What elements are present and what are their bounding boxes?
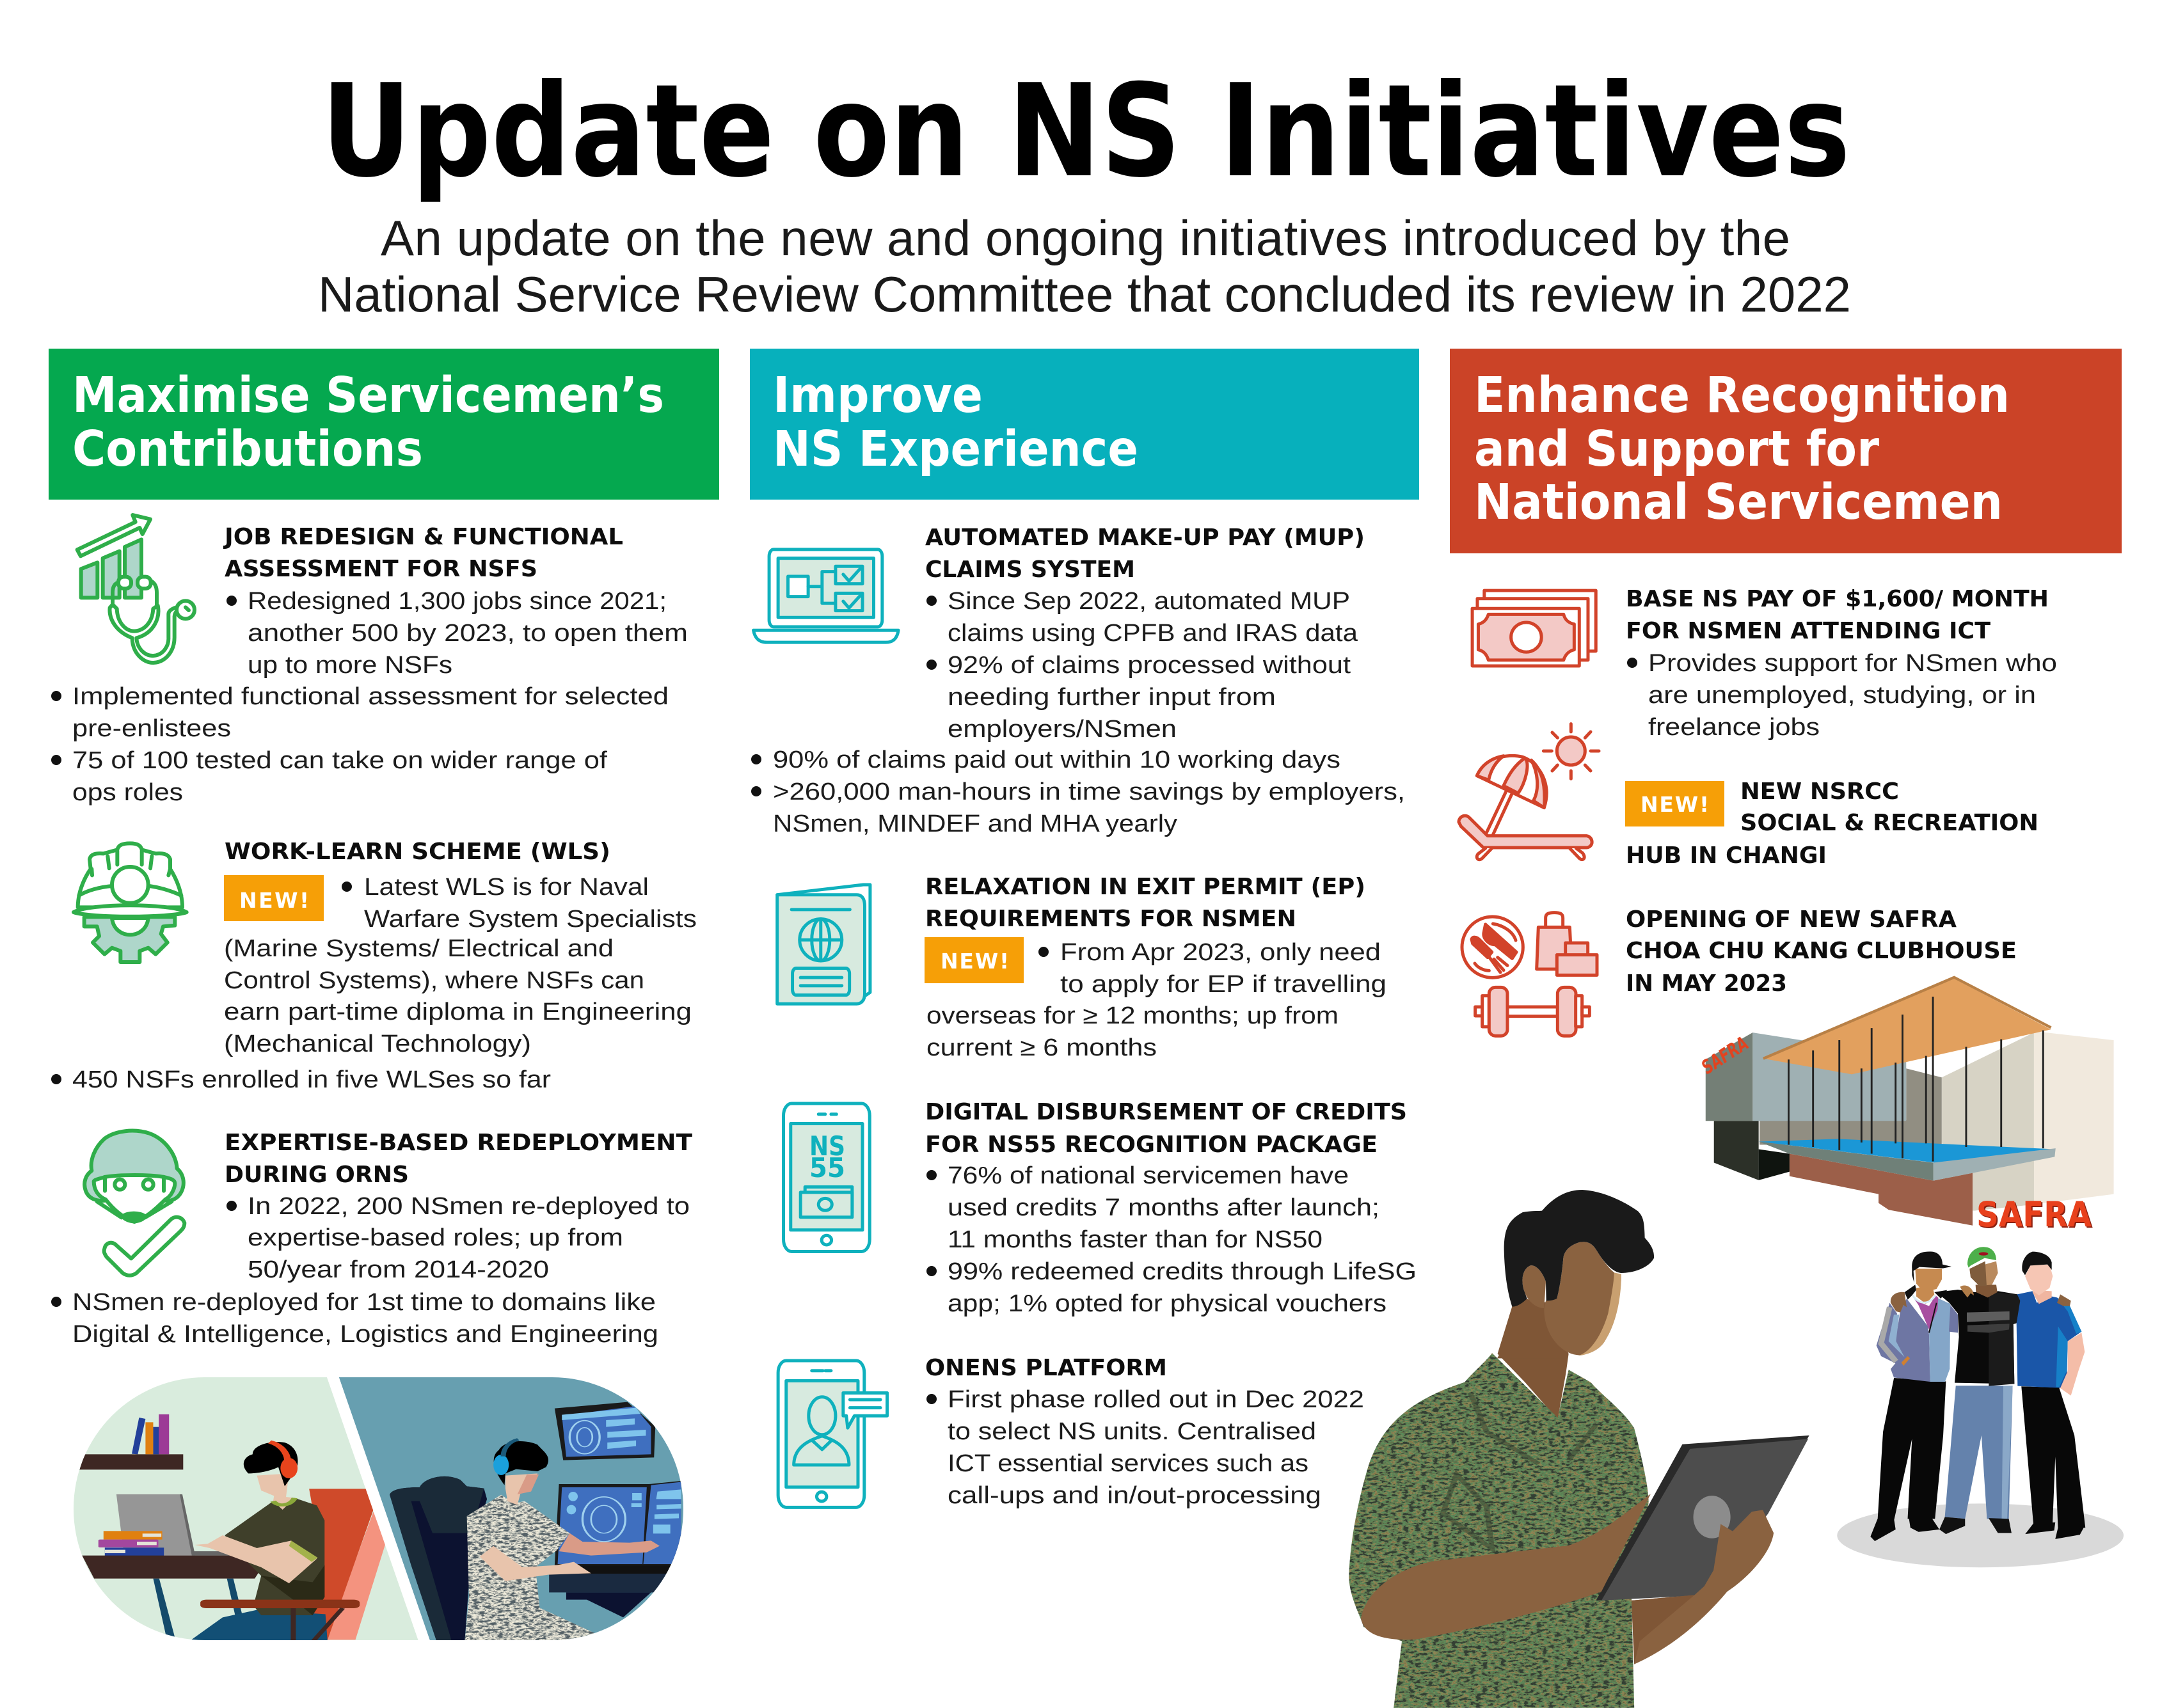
bullet list: 90% of claims paid out within 10 working days: [773, 747, 1340, 773]
left background: [74, 1377, 418, 1640]
tablet: [1596, 1435, 1809, 1601]
bullet list: Provides support for NSmen who: [1648, 650, 2057, 677]
laptop: [116, 1494, 235, 1556]
bullet list: [751, 588, 1405, 837]
lower monitors: [555, 1481, 681, 1565]
section: expertise-based redeployment: [51, 1130, 692, 1348]
subtitle: [318, 210, 1851, 322]
bullet list: call-ups and in/out-processing: [948, 1482, 1321, 1509]
bullet list: 76% of national servicemen have: [948, 1162, 1349, 1189]
bullet list: needing further input from: [948, 684, 1276, 711]
heading: AUTOMATED MAKE-UP PAY (MUP): [925, 525, 1365, 551]
neck: [1498, 1301, 1569, 1419]
body text: (Mechanical Technology): [224, 1031, 531, 1057]
bullet list: 92% of claims processed without: [948, 652, 1351, 679]
heading: JOB REDESIGN & FUNCTIONAL: [223, 524, 623, 550]
badge: new: [1625, 781, 1724, 826]
badge: new: NEW!: [239, 888, 309, 913]
panel: enhance recognition and support header: Enhance Recognition: [1474, 367, 2010, 424]
legs: left friend: [1870, 1378, 1946, 1541]
panel: maximise servicemen's contributions header: Contributions: [72, 421, 423, 478]
collar fold: [1443, 1393, 1596, 1549]
icon: phone with NS55: [784, 1103, 870, 1251]
SAFRA wall logo: SAFRA: [1978, 1196, 2093, 1236]
serviceman: [465, 1439, 660, 1642]
body text: Warfare System Specialists: [364, 906, 697, 933]
heading: NEW NSRCC: [1740, 779, 1899, 805]
bullet list: are unemployed, studying, or in: [1648, 682, 2036, 709]
bullet list: claims using CPFB and IRAS data: [948, 620, 1358, 647]
shelf and books: [79, 1414, 183, 1469]
heading: SOCIAL & RECREATION: [1740, 810, 2038, 836]
heading: CHOA CHU KANG CLUBHOUSE: [1626, 938, 2017, 964]
body text: Control Systems), where NSFs can: [224, 967, 644, 994]
bullet list: used credits 7 months after launch;: [948, 1194, 1379, 1221]
bullet list: to select NS units. Centralised: [948, 1418, 1316, 1445]
heading: [223, 524, 623, 582]
bullet list: employers/NSmen: [948, 716, 1177, 743]
body text: (Marine Systems/ Electrical and: [224, 935, 614, 962]
bullet list: >260,000 man-hours in time savings by employers,: [773, 779, 1405, 805]
bullet list: ICT essential services such as: [948, 1450, 1308, 1477]
bullet list: In 2022, 200 NSmen re-deployed to: [248, 1193, 690, 1220]
bullet list: First phase rolled out in Dec 2022: [948, 1386, 1364, 1413]
seat: [390, 1476, 487, 1642]
body text: [926, 939, 1386, 1061]
heading: FOR NS55 RECOGNITION PACKAGE: [925, 1132, 1378, 1158]
head: [1497, 1190, 1654, 1358]
desk: [82, 1556, 262, 1640]
icon: phone with profile and chat: [778, 1361, 887, 1507]
label: NS 55: 55: [809, 1152, 845, 1183]
bullet list: 50/year from 2014-2020: [248, 1256, 549, 1283]
body text: 450 NSFs enrolled in five WLSes so far: [72, 1066, 551, 1093]
heading: [1626, 779, 2038, 869]
bullet list: [1627, 650, 2057, 741]
label: NS 55: NS: [809, 1130, 845, 1162]
body text: From Apr 2023, only need: [1060, 939, 1381, 966]
section: automated make-up pay claims: [751, 525, 1405, 837]
heading: [225, 1130, 692, 1188]
body text: [51, 874, 697, 1093]
bullet list: 75 of 100 tested can take on wider range of: [72, 747, 607, 774]
heading: DIGITAL DISBURSEMENT OF CREDITS: [925, 1099, 1407, 1125]
illustration: SAFRA clubhouse building: [1706, 977, 2114, 1226]
bullet list: Digital & Intelligence, Logistics and Engineering: [72, 1321, 658, 1348]
title: Update on NS Initiatives: [321, 57, 1850, 206]
heading: [925, 1099, 1407, 1158]
heading: CLAIMS SYSTEM: [925, 557, 1135, 583]
icon: soldier helmet and tick: [84, 1131, 184, 1276]
heading: WORK-LEARN SCHEME (WLS): [225, 839, 610, 865]
section: new NSRCC hub: [1459, 724, 2038, 869]
heading: REQUIREMENTS FOR NSMEN: [925, 906, 1296, 932]
panel: enhance recognition and support header: [1450, 349, 2122, 553]
body text: earn part-time diploma in Engineering: [224, 999, 692, 1025]
subtitle: An update on the new and ongoing initiatives introduced by the: [381, 210, 1790, 266]
body text: overseas for ≥ 12 months; up from: [926, 1002, 1339, 1029]
heading: [1626, 906, 2017, 997]
heading: ONENS PLATFORM: [925, 1355, 1167, 1381]
legs: right friend: [2021, 1386, 2085, 1539]
bullet list: ops roles: [72, 779, 183, 806]
badge: new: NEW!: [941, 949, 1009, 974]
uniform: [1349, 1353, 1649, 1708]
heading: [925, 874, 1365, 932]
panel: improve NS experience header: NS Experience: [773, 421, 1138, 478]
body text: Latest WLS is for Naval: [364, 874, 649, 901]
student: [188, 1442, 360, 1642]
friend: middle torso: [1937, 1247, 2021, 1386]
heading: HUB IN CHANGI: [1626, 842, 1827, 869]
icon: hard hat and gear: [74, 843, 187, 962]
bullet list: NSmen re-deployed for 1st time to domains like: [72, 1289, 656, 1316]
friend: left torso: [1877, 1251, 1958, 1382]
panel: enhance recognition and support header: and Support for: [1474, 421, 1879, 478]
stacked books: [99, 1531, 164, 1556]
white divider: [326, 1375, 431, 1642]
upper monitor: [555, 1402, 655, 1460]
bullet list: Implemented functional assessment for selected: [72, 683, 669, 710]
heading: FOR NSMEN ATTENDING ICT: [1626, 618, 1990, 644]
bullet list: NSmen, MINDEF and MHA yearly: [773, 811, 1177, 837]
bullet list: 99% redeemed credits through LifeSG: [948, 1258, 1417, 1285]
heading: DURING ORNS: [225, 1162, 409, 1188]
illustration: student at laptop and serviceman at radar console: [74, 1377, 683, 1640]
heading: BASE NS PAY OF $1,600/ MONTH: [1626, 586, 2049, 612]
panel: improve NS experience header: Improve: [773, 367, 983, 424]
label: NS 55: [809, 1130, 845, 1183]
heading: RELAXATION IN EXIT PERMIT (EP): [925, 874, 1365, 900]
section: work-learn scheme: [51, 839, 697, 1093]
heading: EXPERTISE-BASED REDEPLOYMENT: [225, 1130, 692, 1156]
panel: maximise servicemen's contributions header: [49, 349, 719, 500]
bullet list: [51, 1193, 690, 1348]
right background: [338, 1375, 710, 1642]
bullet list: [926, 1162, 1417, 1317]
illustration: serviceman with tablet: [1349, 1190, 1809, 1708]
section: exit permit relaxation: [777, 874, 1386, 1061]
bullet list: up to more NSFs: [248, 652, 452, 679]
heading: IN MAY 2023: [1626, 970, 1787, 997]
body text: to apply for EP if travelling: [1060, 971, 1386, 998]
bullet list: Since Sep 2022, automated MUP: [948, 588, 1350, 615]
bullet list: [51, 588, 688, 806]
section: oneNS platform: [778, 1355, 1364, 1509]
console: [548, 1565, 672, 1617]
SAFRA roof sign: SAFRA: [1697, 1032, 1752, 1079]
panel: enhance recognition and support header: National Servicemen: [1474, 474, 2003, 531]
bullet list: Redesigned 1,300 jobs since 2021;: [248, 588, 667, 615]
bullet list: pre-enlistees: [72, 715, 231, 742]
bullet list: expertise-based roles; up from: [248, 1224, 623, 1251]
panel: improve NS experience header: [750, 349, 1419, 500]
body text: current ≥ 6 months: [926, 1034, 1157, 1061]
illustration: three friends on grey platform: [1837, 1247, 2124, 1567]
subtitle: National Service Review Committee that concluded its review in 2022: [318, 266, 1851, 322]
bullet list: another 500 by 2023, to open them: [248, 620, 688, 647]
heading: [1626, 586, 2049, 644]
bullet list: freelance jobs: [1648, 714, 1820, 741]
legs: middle friend: [1939, 1386, 2013, 1534]
icon: dining, shopping and gym: [1462, 913, 1597, 1036]
friend: right torso: [2017, 1252, 2085, 1396]
section: new SAFRA clubhouse: [1462, 906, 2017, 1036]
section: job redesign and functional assessment: [51, 515, 688, 806]
arm holding tablet: [1361, 1494, 1651, 1640]
ground shadow: [1837, 1503, 2124, 1567]
badge: new: [224, 875, 324, 921]
icon: banknotes: [1472, 590, 1596, 666]
section: digital disbursement of credits: [784, 1099, 1417, 1317]
hand and forearm: [1632, 1510, 1774, 1665]
badge: new: [925, 937, 1024, 983]
heading: OPENING OF NEW SAFRA: [1626, 906, 1957, 933]
icon: umbrella, lounger and sun: [1459, 724, 1599, 860]
panel: maximise servicemen's contributions header: Maximise Servicemen’s: [72, 367, 664, 424]
icon: laptop with flow chart: [754, 550, 898, 642]
heading: [925, 525, 1365, 583]
bullet list: app; 1% opted for physical vouchers: [948, 1290, 1386, 1317]
section: base NS pay: [1472, 586, 2057, 741]
heading: ASSESSMENT FOR NSFS: [225, 556, 537, 582]
icon: passport: [777, 885, 870, 1004]
bullet list: 11 months faster than for NS50: [948, 1226, 1323, 1253]
bullet list: [926, 1386, 1364, 1509]
badge: new: NEW!: [1641, 792, 1709, 817]
icon: bar chart and stethoscope: [77, 515, 195, 663]
SAFRA wall logo: SAFRA: [1976, 1194, 2092, 1235]
chair: [309, 1489, 385, 1640]
